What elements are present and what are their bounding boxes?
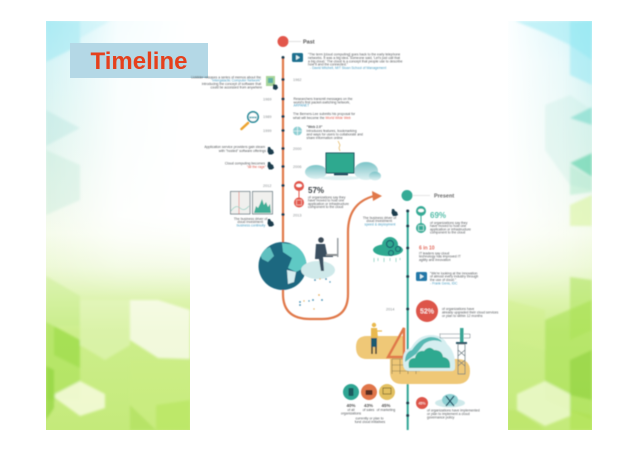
stat: 45% marketing (377, 403, 395, 412)
text: 57% description: of organizations say they (308, 196, 346, 200)
text: cloud computing quote: "The term [cloud computing] goes back to the early telephone (308, 52, 400, 56)
infographic timeline (191, 36, 499, 430)
text: 1989 event: what will become the World Wide Web (293, 116, 351, 120)
year: 1962: 1962 (293, 78, 301, 82)
text: 69% description: have moved to host one (430, 224, 466, 228)
text: cloud computing quote: - David Mitchell, MIT Sloan School of Management (310, 66, 386, 70)
text: 57% description: have moved to host one (308, 198, 344, 202)
icon: hand cursor 2006 (268, 162, 274, 170)
past marker (278, 36, 315, 47)
text: cloud computing quote: a big cloud.' The cloud is a concept that people use to describe (308, 60, 403, 64)
text: 57% description: application or infrastructure (308, 202, 349, 206)
text: 1969 event: world's first packet-switching network, (294, 100, 350, 104)
text: present quote: of almost every industry through (430, 274, 478, 278)
stat: 52% circle (416, 300, 438, 322)
year: 1969: 1969 (263, 98, 271, 102)
text: 52% description: of organizations have (442, 307, 474, 311)
icon: hand cursor present (392, 209, 398, 216)
text: present business driver: cloud investment: (366, 219, 393, 223)
year: 2012: 2012 (263, 184, 271, 188)
text: present business driver: speed & deployment (365, 222, 396, 226)
text: 69% description: of organizations say they (430, 221, 468, 225)
year: 1989: 1989 (263, 115, 271, 119)
arrow: orange timeline path (283, 57, 382, 319)
text: governance description: or plan to implement a cloud (427, 412, 470, 416)
icons: department circles (343, 384, 395, 400)
text: cloud computing quote: networks. It was a big idea. Someone said, 'Let's just call that (308, 56, 400, 60)
text: 1969 event: Researchers transmit messages on the (294, 97, 353, 101)
stat: 45% circle (416, 397, 428, 409)
chart: two monitoring panels (230, 192, 272, 214)
stat: 45% circle: 45% (418, 402, 426, 406)
present marker: Present (434, 194, 454, 200)
text: governance description: of organizations have implemented (427, 408, 480, 412)
icon: document with cursor (266, 76, 278, 90)
panel: left geometric background (46, 21, 190, 430)
stat: 40% organizations: 40% (346, 403, 356, 408)
stat: 40% organizations: organizations (341, 412, 361, 416)
text: currently or plan to: currently or plan to (355, 416, 384, 420)
stat: 43% sales: of sales (363, 408, 375, 412)
year: 2006: 2006 (293, 165, 301, 169)
stat: 57%: 57% (308, 186, 324, 195)
text: 1962 event: Licklider releases a series of memos about the (191, 76, 261, 80)
text: 1962 event: could be accessed from anywhere (211, 86, 262, 90)
past marker: Past (303, 40, 315, 46)
text: business driver: The business driver of (234, 217, 267, 221)
icon: video play (292, 53, 303, 62)
text: present quote: "We're looking at the innovation (430, 272, 478, 276)
stat: 52% circle: 52% (420, 308, 435, 316)
title banner (70, 43, 208, 78)
text: 1989 event: The Berners-Lee submits his proposal for (293, 112, 356, 116)
text: ASP event: with "hosted" software offerings (219, 149, 266, 153)
icon pair: teal cloud and server (416, 206, 426, 233)
text: business driver: business continuity (237, 224, 266, 228)
present marker (402, 190, 454, 201)
icon: hand cursor 2000 (268, 147, 274, 154)
text: 2006 event: "all the rage" (247, 165, 267, 169)
text: 52% description: or plan to within 12 months (442, 314, 483, 318)
illustration: globe (258, 242, 308, 290)
text: business driver: cloud investment: (237, 220, 264, 224)
stat: 40% organizations: of all (347, 408, 355, 412)
icon: hand cursor 2013 (268, 219, 274, 226)
icon: video play present (416, 272, 427, 281)
text: 69% description: application or infrastructure (430, 228, 471, 232)
year: 1999: 1999 (263, 129, 271, 133)
stat: 69%: 69% (430, 211, 446, 220)
icon: magnifier: www (248, 116, 257, 120)
year: 2013: 2013 (293, 214, 301, 218)
stat: 45% marketing: of marketing (377, 408, 395, 412)
text: 52% description: already upgraded their cloud services (442, 310, 499, 314)
text: 69% description: component to the cloud (430, 230, 465, 234)
text: 57% description: component to the cloud (308, 205, 343, 209)
stat: 43% sales: 43% (364, 403, 373, 408)
arrow: teal timeline line (407, 211, 409, 430)
stat: 43% sales (363, 403, 375, 412)
icon pair: cloud and server (294, 181, 304, 208)
illustration: cloud construction scene (356, 323, 470, 384)
icon: magnifier (242, 112, 258, 129)
icon: web globe (293, 126, 302, 136)
text: 1969 event: ARPANET (294, 104, 309, 108)
text: 1962 event: "Intergalactic Computer Network" (211, 78, 262, 82)
text: present quote: - Frank Gens, IDC (430, 282, 458, 286)
stat: 45% marketing: 45% (381, 403, 391, 408)
text: present business driver: The business driver of (363, 216, 396, 220)
year: 2014: 2014 (386, 308, 394, 312)
icon: cloud with tools (435, 394, 465, 408)
text: 1962 event: introducing the concept of software that (202, 82, 261, 86)
stat: 6 in 10: 6 in 10 (419, 246, 435, 252)
icon: cloud with gears (373, 237, 403, 262)
text: 6 in 10 description: technology has improved IT (419, 254, 461, 258)
stat: 40% organizations (341, 403, 361, 416)
data dots (299, 278, 331, 310)
text: cloud computing quote: how it and the connected." (308, 62, 349, 66)
timeline dots (282, 56, 409, 417)
illustration: person at computer (301, 237, 338, 279)
title banner: Timeline (91, 48, 187, 75)
text: governance description: governance policy (427, 416, 455, 420)
text: ASP event: Application service providers gain steam (204, 145, 265, 149)
text: 2006 event: Cloud computing becomes (225, 162, 265, 166)
text: web 2.0: "Web 2.0" (306, 125, 323, 129)
text: 6 in 10 description: IT leaders say cloud (419, 252, 449, 256)
illustration: monitor on clouds (305, 141, 381, 180)
text: 6 in 10 description: agility and innovation (419, 258, 451, 262)
year: 2000: 2000 (293, 147, 301, 151)
text: web 2.0: share information online (306, 136, 343, 140)
text: present quote: the use of cloud." (430, 278, 457, 282)
text: web 2.0: and ways for users to collaborate and (306, 132, 363, 136)
text: web 2.0: introduces features, bookmarking (306, 129, 357, 133)
text: currently or plan to: fund cloud initiatives (355, 420, 386, 424)
panel: right geometric background (508, 21, 592, 430)
